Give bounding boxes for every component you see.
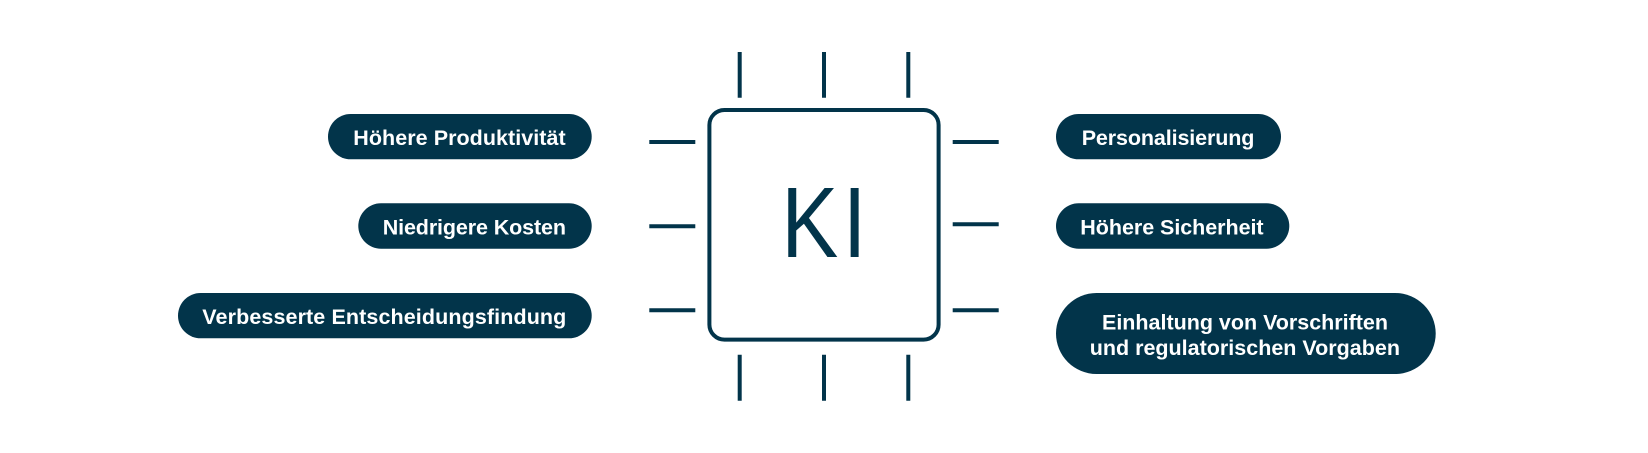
chip body xyxy=(709,110,939,340)
pill: Höhere Produktivität: Höhere Produktivität xyxy=(353,126,566,150)
pill: Einhaltung von Vorschriften und regulatorischen Vorgaben: Einhaltung von Vorschriften xyxy=(1102,310,1388,334)
pill: Personalisierung: Personalisierung xyxy=(1082,126,1254,150)
pill: Einhaltung von Vorschriften und regulatorischen Vorgaben xyxy=(1056,293,1436,374)
pill: Höhere Sicherheit xyxy=(1056,203,1289,249)
pill: Höhere Produktivität xyxy=(328,114,592,159)
pill: Personalisierung xyxy=(1056,114,1281,159)
chip icon xyxy=(649,52,999,401)
pill: Einhaltung von Vorschriften und regulatorischen Vorgaben: und regulatorischen Vorgaben xyxy=(1090,336,1400,360)
chip label: KI xyxy=(781,167,867,278)
pill: Verbesserte Entscheidungsfindung xyxy=(178,293,592,338)
pill: Verbesserte Entscheidungsfindung: Verbesserte Entscheidungsfindung xyxy=(202,305,566,329)
pill: Höhere Sicherheit: Höhere Sicherheit xyxy=(1080,215,1264,239)
pill: Niedrigere Kosten xyxy=(358,203,592,249)
chip pins xyxy=(649,52,999,401)
pill: Niedrigere Kosten: Niedrigere Kosten xyxy=(383,215,566,239)
